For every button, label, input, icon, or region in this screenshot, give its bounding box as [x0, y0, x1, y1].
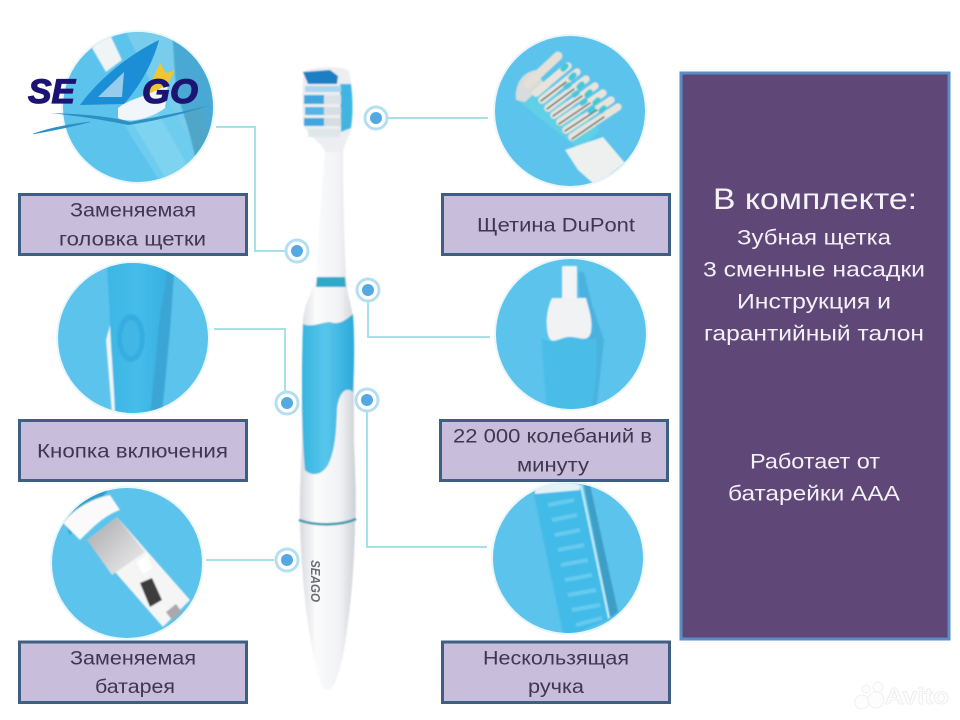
contents list	[703, 226, 925, 346]
logo swooshes	[50, 105, 210, 125]
teal side of head	[340, 84, 352, 132]
battery note: батарейки ААА	[728, 482, 901, 506]
toothbrush handle	[300, 148, 356, 689]
panel: package contents	[681, 73, 949, 639]
panel heading: В комплекте:	[713, 183, 917, 216]
battery note	[728, 450, 901, 506]
teal body ring	[299, 519, 356, 524]
label: DuPont bristles: Щетина DuPont	[477, 214, 636, 236]
circle: DuPont bristles	[490, 34, 650, 189]
label: DuPont bristles	[442, 194, 670, 254]
contents list: Зубная щетка	[737, 226, 891, 250]
callout dots	[276, 107, 387, 571]
toothbrush head	[302, 67, 352, 152]
contents list: 3 сменные насадки	[703, 258, 925, 282]
contents list: Инструкция и	[737, 290, 891, 314]
label: replaceable battery: Заменяемая	[70, 648, 196, 670]
brand mark on handle: SEAGO	[308, 560, 323, 602]
circle: non-slip handle	[488, 478, 648, 638]
label: power button	[20, 420, 246, 480]
connector lines	[206, 118, 490, 560]
label: non-slip handle: Нескользящая	[483, 648, 629, 670]
label: non-slip handle	[442, 642, 670, 702]
label: replaceable battery	[20, 642, 246, 702]
label: 22 000 vibrations per minute: 22 000 колебаний в	[453, 426, 652, 448]
label: power button: Кнопка включения	[37, 440, 228, 462]
circle: replaceable battery	[48, 485, 208, 645]
logo: SEAGO: GO	[142, 73, 198, 111]
logo star	[136, 63, 175, 108]
label: 22 000 vibrations per minute	[440, 420, 668, 480]
contents list: гарантийный талон	[704, 322, 924, 346]
label: 22 000 vibrations per minute: минуту	[517, 454, 589, 476]
circle: replaceable brush head	[61, 30, 215, 184]
label: non-slip handle: ручка	[528, 676, 584, 698]
toothbrush	[299, 67, 356, 689]
circle: power button	[55, 260, 215, 420]
bristle rows	[304, 86, 341, 137]
dark blue tuft	[303, 70, 338, 84]
logo sail	[80, 40, 159, 105]
circle: 22 000 vibrations	[490, 255, 650, 415]
teal collar	[316, 277, 346, 287]
watermark: Avito	[855, 682, 949, 709]
label: replaceable battery: батарея	[95, 676, 175, 698]
logo wordmark: SE	[28, 73, 76, 111]
logo: SEAGO	[28, 40, 210, 134]
label: replaceable brush head: головка щетки	[59, 228, 206, 250]
watermark: Avito: Avito	[885, 683, 949, 709]
blue grip	[302, 314, 354, 474]
label: replaceable brush head: Заменяемая	[70, 200, 196, 222]
label: replaceable brush head	[20, 194, 246, 254]
battery note: Работает от	[750, 450, 880, 474]
